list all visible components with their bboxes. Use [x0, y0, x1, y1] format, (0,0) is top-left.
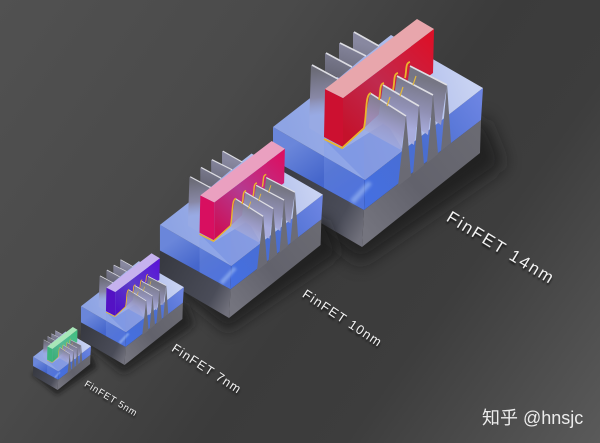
gate: green	[47, 327, 77, 362]
block: FinFET 14nm	[268, 19, 505, 265]
block: FinFET 7nm	[79, 253, 195, 374]
label: FinFET 10nm: FinFET 10nm	[300, 286, 386, 350]
label: FinFET 5nm: FinFET 5nm	[82, 379, 139, 419]
gate: magenta	[200, 141, 285, 240]
gate: red	[324, 19, 434, 147]
block: FinFET 5nm	[32, 327, 97, 395]
block: FinFET 10nm	[156, 141, 340, 332]
watermark: 知乎 @hnsjc	[482, 408, 583, 428]
label: FinFET 14nm: FinFET 14nm	[443, 207, 559, 288]
label: FinFET 7nm: FinFET 7nm	[169, 341, 244, 397]
gate: purple	[106, 253, 160, 316]
